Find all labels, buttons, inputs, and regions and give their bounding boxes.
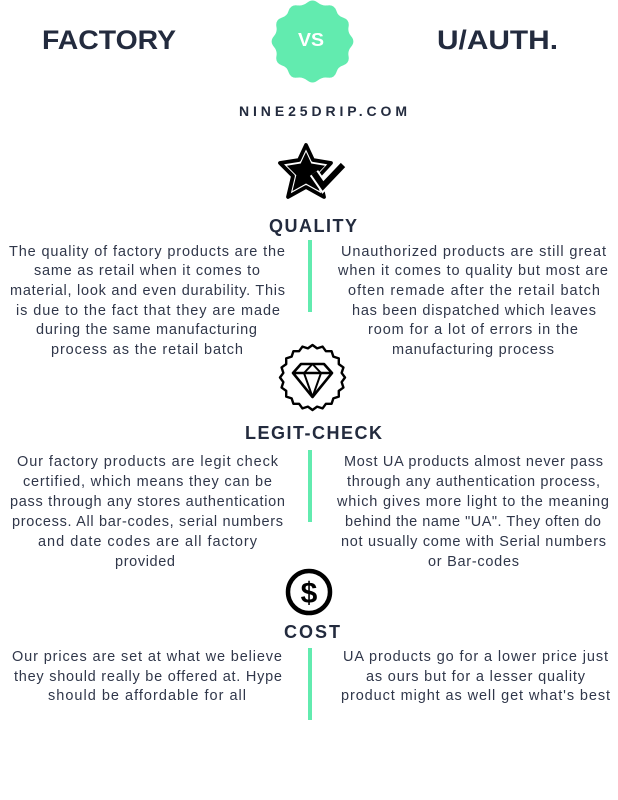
text: unauthorized cost — [341, 649, 610, 704]
text: unauthorized legit-check: Most UA products almost never pass — [344, 454, 603, 470]
text: unauthorized quality: has been dispatched which leaves — [352, 303, 596, 319]
text: unauthorized legit-check: behind the name "UA". They often do — [345, 514, 601, 530]
website: NINE25DRIP.COM — [239, 103, 407, 119]
text: unauthorized cost: product might as well get what's best — [341, 688, 610, 704]
text: factory quality: process as the retail batch — [51, 342, 243, 358]
text: unauthorized quality: manufacturing process — [392, 342, 554, 358]
icon: star with check — [280, 145, 343, 197]
text: factory legit-check — [10, 454, 285, 570]
text: unauthorized quality — [337, 244, 608, 358]
text: unauthorized cost: as ours but for a lesser quality — [366, 669, 586, 685]
title: unauthorized: U/AUTH. — [437, 25, 558, 55]
icon: diamond seal — [280, 345, 345, 410]
divider: quality — [308, 240, 312, 312]
divider: cost — [308, 648, 312, 720]
text: factory quality — [9, 244, 285, 358]
text: unauthorized legit-check: not usually come with Serial numbers — [341, 534, 606, 550]
text: factory legit-check: and date codes are all factory — [38, 534, 258, 550]
text: factory quality: material, look and even durability. This — [10, 283, 285, 299]
text: factory quality: The quality of factory products are the — [9, 244, 285, 260]
text: factory quality: during the same manufacturing — [36, 322, 257, 338]
text: factory legit-check: provided — [115, 554, 175, 570]
badge: vs — [272, 1, 353, 82]
text: factory cost — [12, 649, 282, 704]
text: unauthorized legit-check: or Bar-codes — [428, 554, 519, 570]
text: unauthorized legit-check: which gives more light to the meaning — [336, 494, 609, 510]
icon: dollar coin: $ — [301, 577, 318, 610]
text: factory legit-check: process. All bar-codes, serial numbers — [12, 514, 283, 530]
text: unauthorized quality: room for a lot of errors in the — [368, 322, 578, 338]
text: factory cost: they should really be offered at. Hype — [14, 669, 282, 685]
heading: cost: COST — [284, 622, 340, 642]
text: factory cost: Our prices are set at what we believe — [12, 649, 282, 665]
text: factory legit-check: certified, which means they can be — [23, 474, 272, 490]
divider: legit-check — [308, 450, 312, 522]
text: unauthorized quality: when it comes to quality but most are — [337, 263, 608, 279]
text: unauthorized legit-check — [336, 454, 609, 570]
text: factory legit-check: Our factory products are legit check — [17, 454, 279, 470]
title: factory: FACTORY — [42, 25, 176, 55]
text: unauthorized legit-check: through any authentication process, — [347, 474, 600, 490]
text: unauthorized cost: UA products go for a lower price just — [343, 649, 608, 665]
text: factory quality: is due to the fact that they are made — [16, 303, 280, 319]
text: factory legit-check: pass through any stores authentication — [10, 494, 285, 510]
text: factory cost: should be affordable for all — [48, 688, 246, 704]
icon: dollar coin — [288, 571, 330, 613]
text: unauthorized quality: often remade after the retail batch — [348, 283, 600, 299]
badge: vs: VS — [298, 30, 324, 50]
text: factory quality: same as retail when it comes to — [34, 263, 260, 279]
text: unauthorized quality: Unauthorized products are still great — [341, 244, 606, 260]
heading: quality: QUALITY — [269, 216, 357, 236]
heading: legit-check: LEGIT-CHECK — [245, 423, 382, 443]
